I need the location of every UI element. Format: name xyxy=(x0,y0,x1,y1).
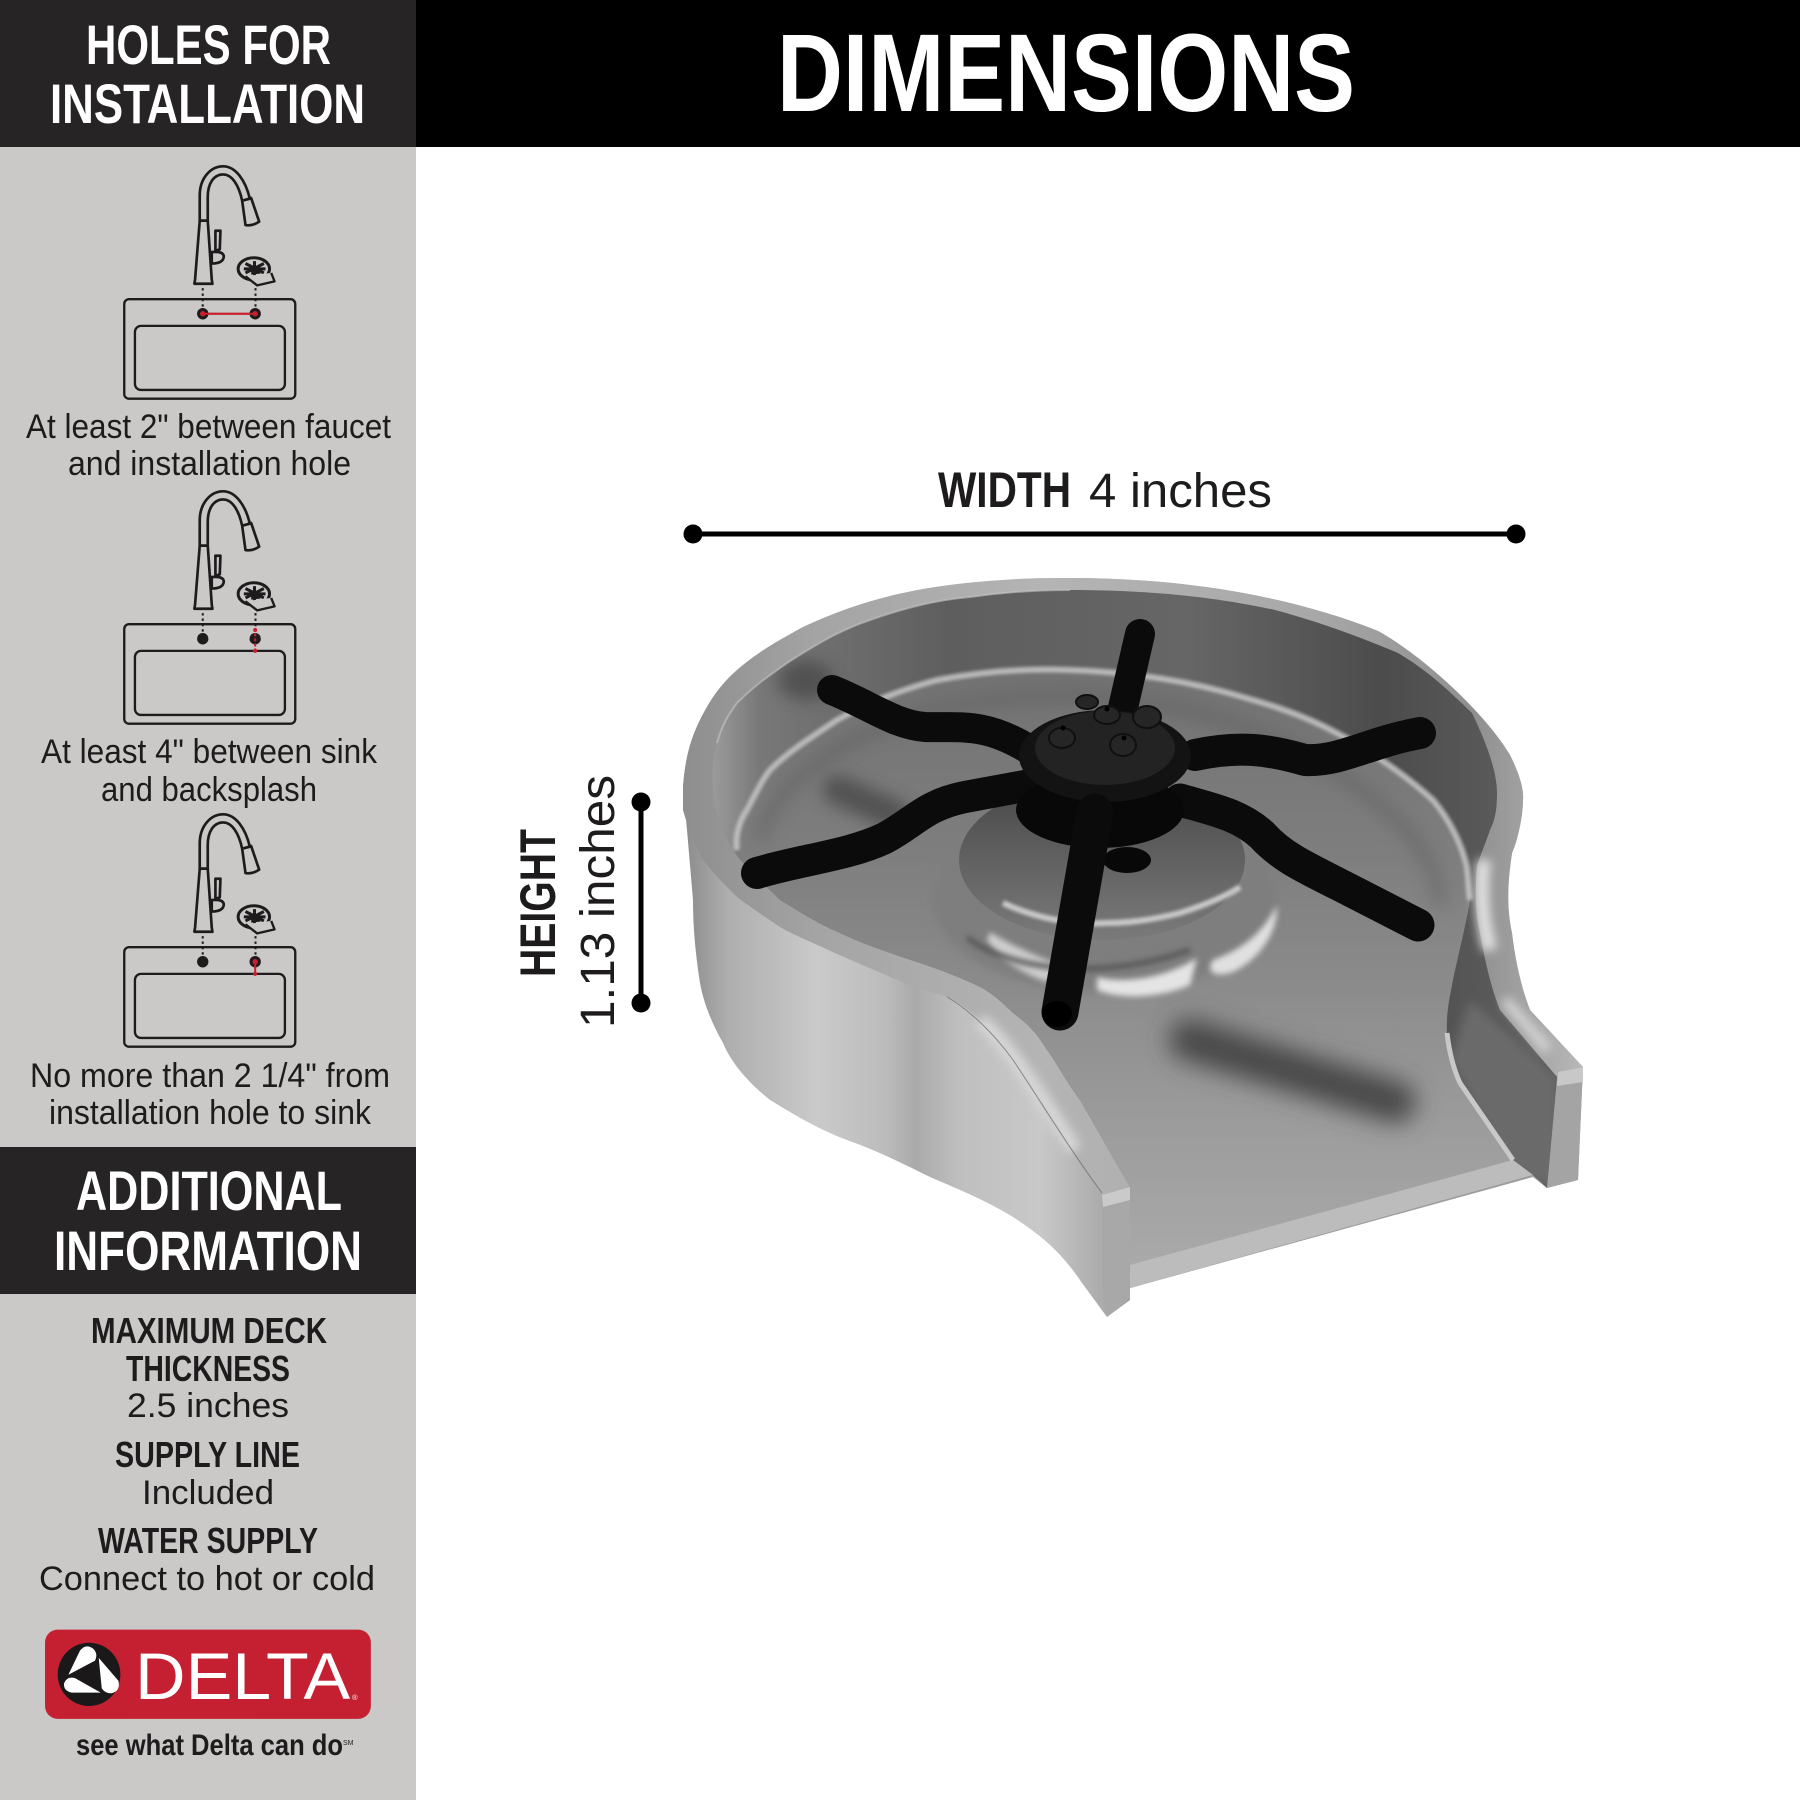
caption: backsplash spacing: At least 4" between sink xyxy=(41,733,378,771)
heading: additional information: ADDITIONAL xyxy=(76,1159,342,1222)
logo: delta: ® xyxy=(352,1693,358,1702)
panel: left sidebar xyxy=(0,0,416,1800)
lower right wall xyxy=(1450,1000,1557,1190)
text block: maximum deck thickness: MAXIMUM DECK xyxy=(91,1310,327,1351)
caption: sink distance xyxy=(30,1057,390,1132)
centre dome base xyxy=(950,925,1255,991)
caption: backsplash spacing xyxy=(41,733,378,809)
title bar: dimensions xyxy=(416,0,1800,147)
tagline: SM xyxy=(343,1740,354,1747)
heading: additional information xyxy=(0,1147,416,1294)
heading: additional information: INFORMATION xyxy=(54,1219,362,1282)
title bar: dimensions: DIMENSIONS xyxy=(777,12,1355,135)
right end cap xyxy=(1547,1067,1583,1188)
heading: holes for installation: HOLES FOR xyxy=(86,13,331,76)
front lip and right wall edge xyxy=(1130,1160,1533,1290)
product: glass rinser xyxy=(683,578,1590,1317)
spoke opening xyxy=(1042,1001,1072,1027)
dimension: width: 4 inches xyxy=(1089,465,1272,518)
dimension: height: 1.13 inches xyxy=(572,775,625,1028)
cast shadows xyxy=(1190,1040,1395,1102)
caption: backsplash spacing: and backsplash xyxy=(101,771,317,809)
caption: sink distance: No more than 2 1/4" from xyxy=(30,1057,390,1095)
left end cap xyxy=(1102,1187,1130,1317)
dimension: height: HEIGHT xyxy=(510,829,566,977)
floor xyxy=(700,669,1533,1290)
logo: delta: DELTA xyxy=(135,1640,350,1713)
text block: maximum deck thickness: 2.5 inches xyxy=(127,1387,289,1425)
text block: maximum deck thickness: THICKNESS xyxy=(126,1348,290,1389)
nozzle holes xyxy=(1060,706,1126,740)
text block: water supply xyxy=(39,1520,375,1598)
caption: faucet spacing xyxy=(26,408,392,483)
dish highlight xyxy=(737,669,1470,900)
rim highlights xyxy=(1482,860,1490,950)
centre dome disc xyxy=(959,804,1245,926)
text block: water supply: WATER SUPPLY xyxy=(98,1520,318,1561)
icon: faucet and sink, 2 inch spacing xyxy=(124,166,295,399)
nozzles xyxy=(1049,695,1161,756)
caption: faucet spacing: and installation hole xyxy=(68,445,351,483)
wall shadow behind spoke tip xyxy=(777,660,833,700)
text block: water supply: Connect to hot or cold xyxy=(39,1560,375,1598)
dimension: width xyxy=(684,462,1526,544)
heading: holes for installation: INSTALLATION xyxy=(50,72,365,135)
dimension: width: WIDTH xyxy=(938,462,1071,518)
rim xyxy=(683,578,1583,1195)
text block: supply line xyxy=(115,1434,300,1512)
spokes xyxy=(757,634,1420,925)
text block: supply line: SUPPLY LINE xyxy=(115,1434,300,1475)
text block: supply line: Included xyxy=(142,1474,274,1512)
caption: faucet spacing: At least 2" between faucet xyxy=(26,408,392,446)
inner bowl xyxy=(700,580,1590,1300)
outer wall xyxy=(683,578,1583,1317)
caption: sink distance: installation hole to sink xyxy=(49,1094,372,1132)
front spoke xyxy=(1060,812,1095,1012)
heading: holes for installation xyxy=(0,0,416,147)
icon: faucet and sink, 4 inch backsplash xyxy=(124,491,295,724)
logo: delta xyxy=(45,1630,371,1719)
dimension: height xyxy=(510,775,650,1028)
text block: maximum deck thickness xyxy=(91,1310,327,1425)
hub xyxy=(1016,772,1184,848)
tagline: see what Delta can do xyxy=(76,1729,343,1762)
icon: faucet and sink, 2 1/4 inch from sink xyxy=(124,814,295,1047)
